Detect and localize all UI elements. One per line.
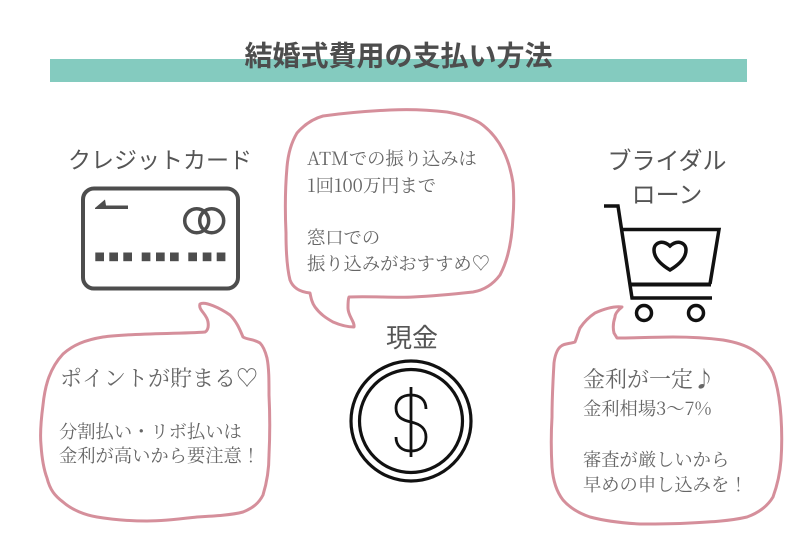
text: cash notes: [307, 145, 490, 276]
heading: credit card: クレジットカード: [68, 141, 252, 175]
heading: bridal loan: ローン: [632, 175, 702, 210]
text: interest fixed: 金利が一定♪: [583, 363, 715, 394]
speech bubble: cash: [285, 110, 514, 327]
text: loan notes: 審査が厳しいから: [583, 446, 729, 472]
icon: shopping cart: [604, 206, 719, 320]
text: loan notes: 早めの申し込みを！: [583, 471, 748, 497]
title band: [50, 59, 747, 82]
text: credit card points: ポイントが貯まる♡: [60, 362, 258, 393]
heading: bridal loan: ブライダル: [607, 141, 727, 176]
text: cash notes: 1回100万円まで: [307, 172, 436, 198]
text: credit card note: [59, 418, 260, 468]
text: loan notes: 金利相場3～7%: [583, 395, 712, 421]
text: cash notes: ATMでの振り込みは: [307, 145, 477, 171]
title: 結婚式費用の支払い方法: [244, 34, 553, 74]
text: credit card note: 分割払い・リボ払いは: [59, 418, 242, 444]
heading: bridal loan: [607, 141, 727, 210]
icon: coin: [351, 361, 471, 481]
speech bubble: bridal loan: [551, 307, 782, 524]
speech bubble: credit card: [41, 303, 270, 521]
icon: credit card: [83, 188, 238, 288]
text: cash notes: 振り込みがおすすめ♡: [307, 250, 490, 276]
heading: cash: 現金: [386, 318, 438, 355]
text: cash notes: 窓口での: [307, 224, 380, 250]
text: loan notes: [583, 395, 748, 497]
text: credit card note: 金利が高いから要注意！: [59, 442, 260, 468]
